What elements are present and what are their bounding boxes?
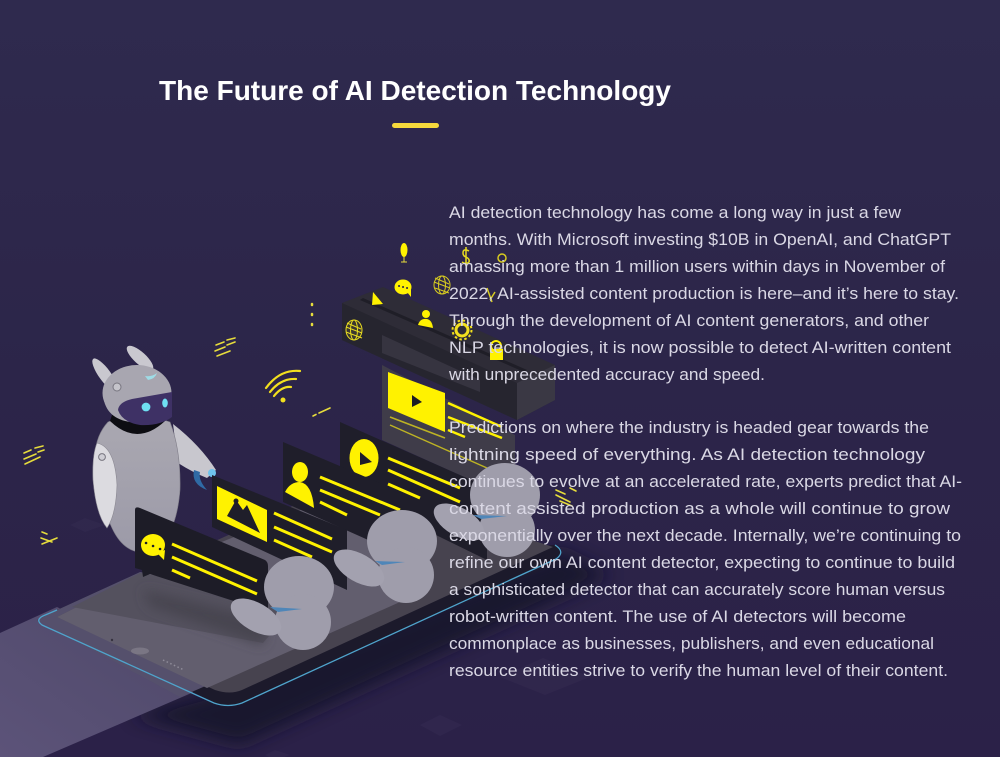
paragraph 2: Predictions on where the industry is headed gear towards the	[449, 419, 929, 437]
device body	[342, 287, 555, 420]
robot hand glow	[194, 470, 207, 490]
icon: globe	[346, 320, 362, 340]
yellow video thumbnail	[388, 372, 445, 432]
top device	[342, 287, 555, 420]
person icon	[285, 462, 314, 508]
robot far arm	[173, 424, 216, 478]
robot collar	[110, 415, 165, 434]
icon: pin ring	[498, 254, 506, 262]
robot ears	[88, 355, 122, 395]
card: video post	[340, 422, 487, 560]
text lines	[274, 513, 332, 557]
text lines	[388, 458, 460, 502]
icon: dollar	[462, 247, 469, 266]
floating sparkle marks	[24, 304, 576, 544]
video caption lines	[448, 403, 502, 438]
paragraph 2	[449, 419, 962, 680]
paragraph 2: exponentially over the next decade. Internally, we’re continuing to	[449, 527, 961, 545]
text lines	[320, 477, 400, 515]
platform dark base	[37, 545, 561, 705]
paragraph 1: AI detection technology has come a long way in just a few	[449, 204, 901, 222]
paragraph 2: content assisted production as a whole will continue to grow	[449, 500, 950, 518]
paragraph 2: refine our own AI content detector, expecting to continue to build	[449, 554, 955, 572]
device screen	[382, 335, 480, 392]
paragraph 2: resource entities strive to verify the human level of their content.	[449, 662, 948, 680]
shadow under chat card	[143, 590, 268, 645]
blob arm	[328, 542, 390, 594]
video panel body	[382, 365, 515, 500]
robot visor	[118, 392, 172, 425]
light beam	[0, 607, 210, 757]
title: The Future of AI Detection Technology	[159, 75, 671, 106]
faint floor diamonds	[70, 518, 590, 757]
grey blob figure 3	[428, 463, 540, 557]
paragraph 1: 2022, AI-assisted content production is here–and it’s here to stay.	[449, 285, 959, 303]
platform blue outline	[39, 545, 561, 706]
card: image post	[212, 475, 347, 590]
paragraph 2: robot-written content. The use of AI detectors will become	[449, 608, 906, 626]
paragraph 1: with unprecedented accuracy and speed.	[448, 366, 765, 384]
paragraph 1: Through the development of AI content generators, and other	[449, 312, 930, 330]
platform base lit by beam	[37, 572, 400, 697]
blob arm	[428, 496, 490, 548]
grey blob figure 2	[328, 510, 437, 603]
paragraph 1: months. With Microsoft investing $10B in OpenAI, and ChatGPT	[449, 231, 951, 249]
floating icons above device	[394, 243, 506, 302]
robot	[88, 342, 216, 552]
paragraph 2: continues to evolve at an accelerated rate, experts predict that AI-	[449, 473, 962, 491]
device slot	[360, 298, 527, 372]
paragraph 1	[448, 204, 959, 384]
play icon	[350, 439, 378, 477]
inner screen	[72, 573, 300, 643]
robot head	[102, 365, 172, 421]
icon: gear	[452, 320, 472, 340]
icon: triangle	[372, 292, 383, 305]
icon: wifi	[266, 371, 300, 402]
icon: globe outline	[434, 276, 450, 294]
card: person post	[283, 442, 413, 560]
icon: small bulb	[487, 288, 495, 302]
icon: lock	[490, 341, 503, 360]
paragraph 2: a sophisticated detector that can accurately score human versus	[449, 581, 945, 599]
paragraph 1: amassing more than 1 million users within days in November of	[449, 258, 945, 276]
paragraph 1: NLP technologies, it is now possible to detect AI-written content	[449, 339, 951, 357]
platform button details	[111, 639, 184, 670]
icon: microphone	[400, 243, 408, 262]
paragraph 2: commonplace as businesses, publishers, and even educational	[449, 635, 934, 653]
chat icon	[141, 534, 165, 560]
card: chat post	[135, 507, 268, 612]
robot body	[95, 416, 180, 552]
text lines	[172, 544, 257, 594]
icon: person small	[418, 310, 433, 328]
grey blob figure 1	[225, 556, 334, 650]
floor shadow	[130, 550, 610, 745]
robot side arm	[93, 443, 117, 528]
blob arm	[225, 591, 287, 643]
platform top surface	[57, 480, 553, 692]
platform illustration	[0, 480, 610, 757]
title underline	[392, 123, 439, 128]
surface lit by beam	[57, 490, 400, 688]
icon: chat bubble	[394, 280, 412, 297]
paragraph 2: lightning speed of everything. As AI detection technology	[449, 446, 926, 464]
video panel	[382, 365, 515, 500]
image icon	[217, 486, 267, 542]
